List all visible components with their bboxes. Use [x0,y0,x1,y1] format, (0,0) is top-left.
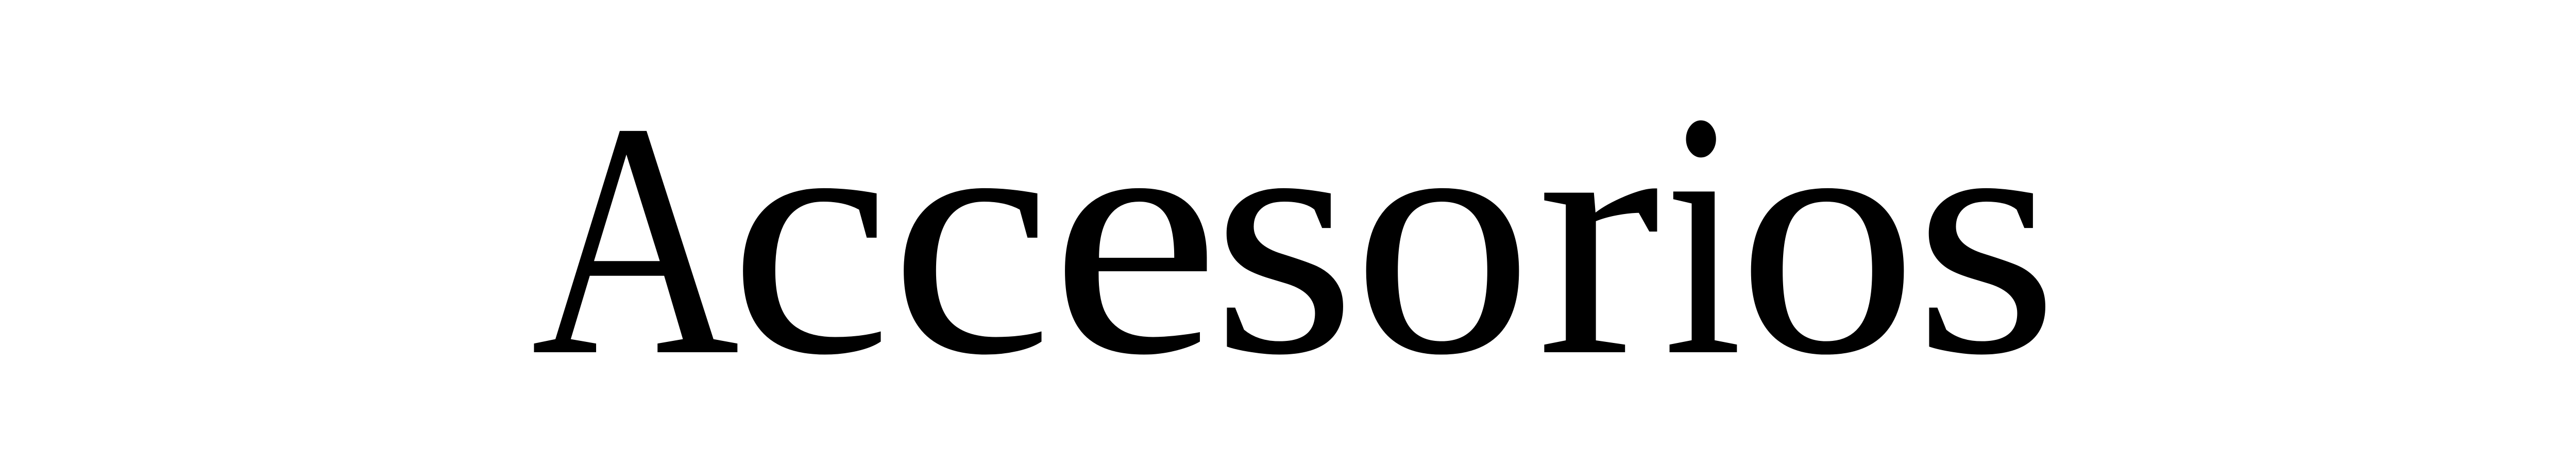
title: Accesorios: s [1211,43,1357,426]
title: Accesorios: o [1352,43,1533,426]
title: Accesorios [531,40,2059,428]
title: Accesorios: e [1050,43,1220,426]
title: Accesorios: s [1913,43,2059,426]
title: Accesorios: c [729,43,892,426]
title: Accesorios: A [531,54,739,425]
title: Accesorios: i [1664,40,1742,428]
title: Accesorios: o [1737,43,1918,426]
title: Accesorios: c [890,43,1053,426]
title: Accesorios: r [1537,43,1660,428]
